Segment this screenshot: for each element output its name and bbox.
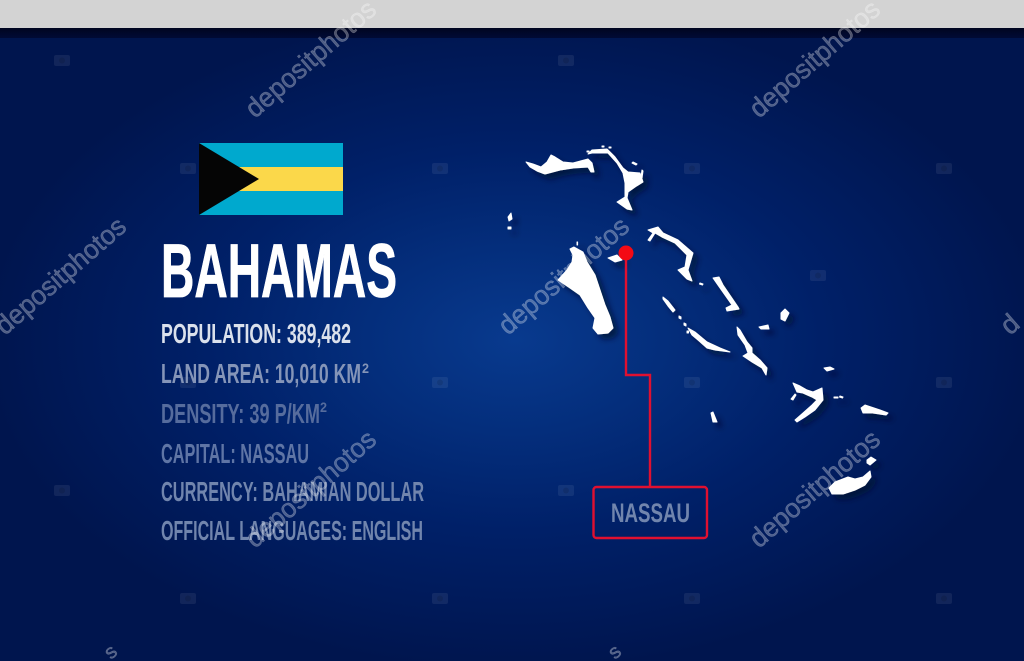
map pin: Nassau [618, 246, 634, 260]
depositphotos watermarks: depositphotos [743, 424, 886, 554]
currency: CURRENCY: BAHAMIAN DOLLAR [161, 476, 424, 507]
density [161, 398, 327, 429]
callout: Nassau label: NASSAU [611, 498, 690, 528]
camera watermark icons [54, 55, 952, 604]
depositphotos watermarks: depositphotos [492, 211, 635, 341]
flag of the Bahamas [199, 143, 343, 215]
land area: 2 [362, 360, 369, 376]
land area [161, 358, 369, 389]
land area: LAND AREA: 10,010 KM [161, 358, 361, 389]
title: BAHAMAS [161, 229, 397, 314]
population: POPULATION: 389,482 [161, 318, 351, 349]
country facts [161, 318, 424, 546]
density: DENSITY: 39 P/KM [161, 398, 320, 429]
top light bar [0, 0, 1024, 38]
leader line from Nassau to label [626, 253, 650, 487]
official languages: OFFICIAL LANGUAGES: ENGLISH [161, 515, 423, 546]
callout: Nassau label [594, 487, 707, 538]
capital: CAPITAL: NASSAU [161, 438, 309, 469]
depositphotos watermarks: depositphotos [239, 424, 382, 554]
density: 2 [320, 399, 327, 415]
map of the Bahamas islands [508, 146, 888, 494]
